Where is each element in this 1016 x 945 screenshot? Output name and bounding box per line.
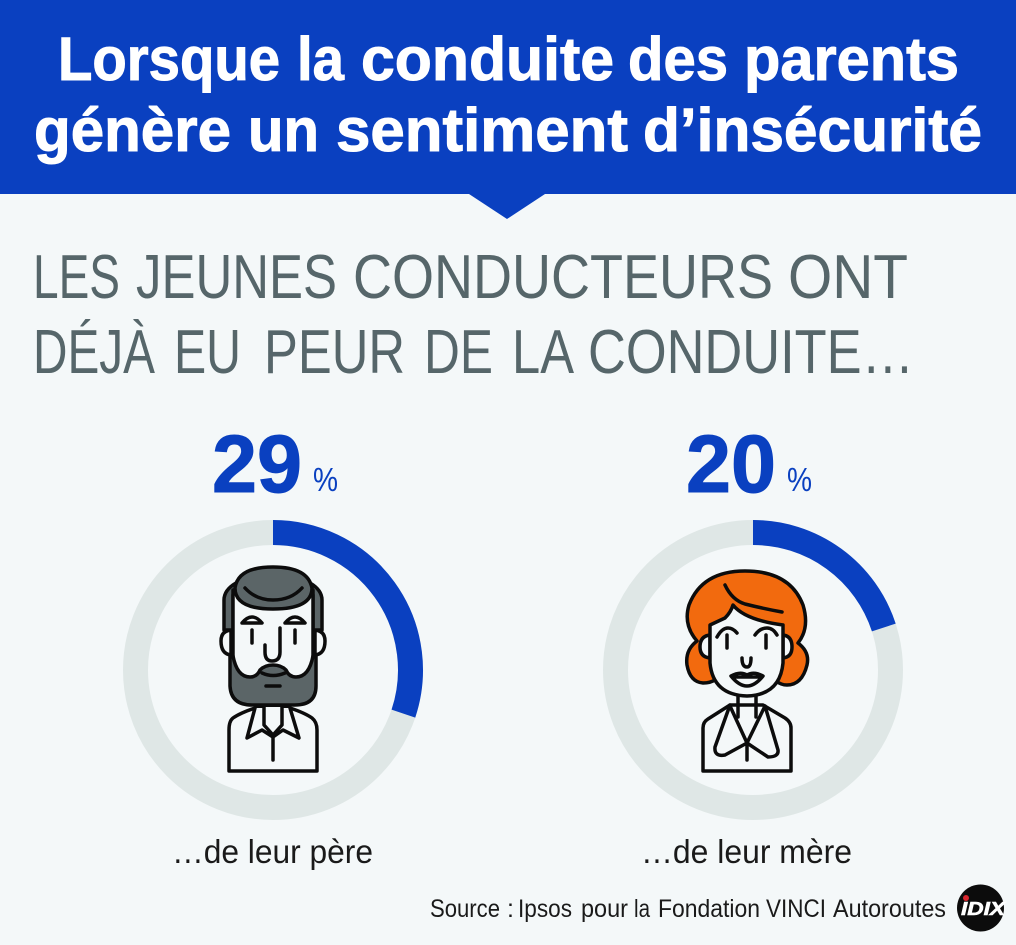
father hair cap — [235, 567, 312, 609]
subtitle: DE — [424, 318, 493, 387]
mother fringe line — [725, 585, 782, 612]
father ears — [221, 630, 325, 655]
mother percentage: 20 — [686, 419, 776, 510]
subtitle: CONDUITE… — [588, 318, 914, 387]
mother label: …de leur mère — [641, 833, 852, 870]
source: Source — [430, 895, 500, 923]
panel: father — [136, 419, 410, 870]
title: des — [628, 25, 728, 93]
title: conduite — [361, 25, 614, 93]
father face — [233, 590, 313, 695]
father percentage: % — [313, 461, 338, 498]
subtitle: LA — [512, 318, 575, 387]
mother neck — [738, 696, 756, 717]
source — [430, 895, 946, 923]
subtitle: DÉJÀ — [33, 318, 155, 387]
title: la — [297, 25, 345, 93]
subtitle: JEUNES — [136, 243, 337, 312]
source: VINCI — [766, 895, 826, 923]
mother hair — [687, 571, 808, 685]
icon: mother — [687, 571, 808, 771]
father donut chart — [136, 532, 410, 808]
icon: father — [221, 567, 325, 771]
father hair sides — [224, 583, 322, 630]
subtitle: CONDUCTEURS — [353, 243, 773, 312]
subtitle: ONT — [788, 243, 908, 312]
source: pour — [581, 895, 628, 923]
father percentage: 29 — [212, 419, 302, 510]
mother collar — [715, 705, 778, 760]
header banner — [0, 0, 1016, 219]
subtitle: PEUR — [264, 318, 405, 387]
title: un — [248, 96, 319, 164]
logo: IDIX — [957, 884, 1006, 932]
mother percentage: % — [787, 461, 812, 498]
title — [34, 25, 982, 164]
father body — [229, 708, 317, 771]
father collar — [247, 707, 299, 760]
father facial lines — [242, 588, 305, 686]
panel: mother — [616, 419, 890, 870]
title: parents — [744, 25, 959, 93]
father beard — [230, 656, 316, 705]
title: sentiment — [336, 96, 628, 164]
title: d’insécurité — [643, 96, 982, 164]
subtitle: EU — [174, 318, 241, 387]
source: : — [507, 895, 514, 923]
mother ears — [700, 635, 792, 658]
subtitle — [33, 243, 914, 387]
logo: IDIX: IDIX — [961, 899, 1006, 919]
source: Ipsos — [518, 895, 572, 923]
source: Fondation — [658, 895, 760, 923]
source: la — [634, 895, 650, 923]
mother face — [710, 605, 783, 696]
mother donut chart — [616, 532, 890, 808]
subtitle: LES — [33, 243, 120, 312]
father label: …de leur père — [172, 833, 373, 870]
mother facial lines — [717, 628, 777, 686]
title: génère — [34, 96, 231, 164]
title: Lorsque — [58, 25, 280, 93]
source: Autoroutes — [833, 895, 946, 923]
mother body — [703, 705, 791, 771]
